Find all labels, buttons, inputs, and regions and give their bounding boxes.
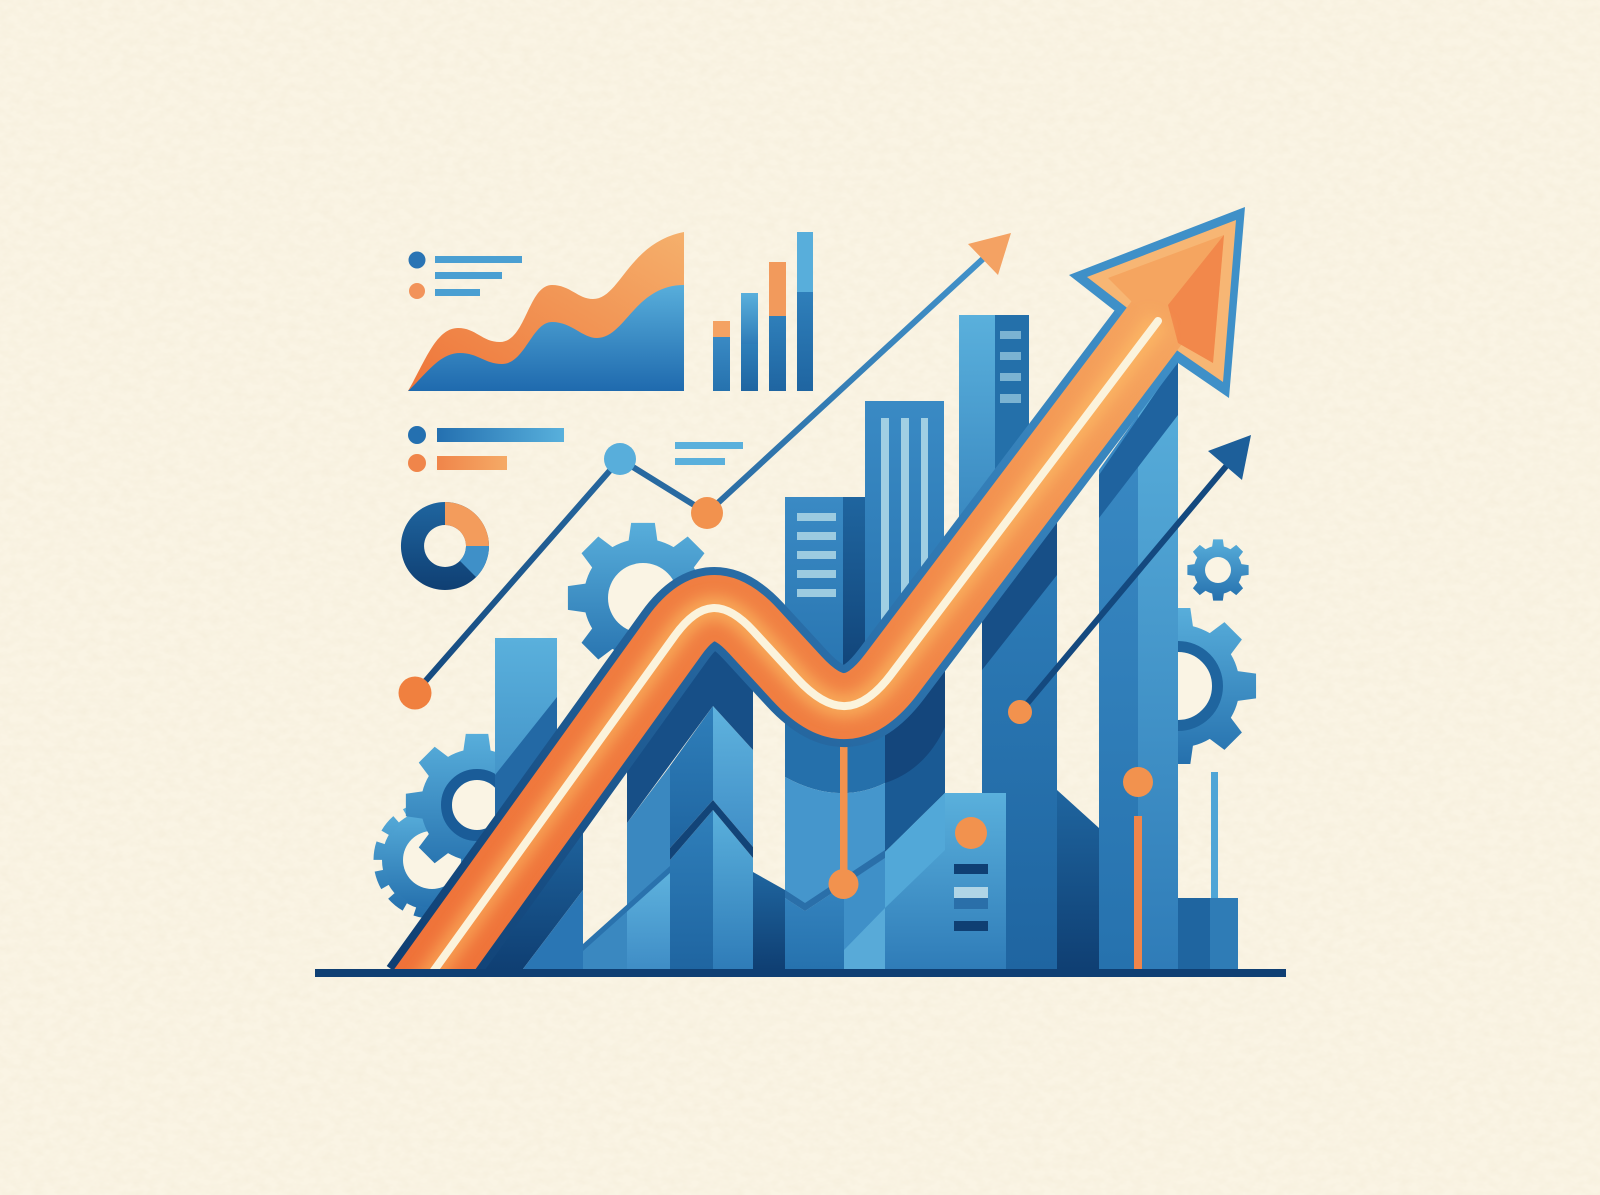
arrow head inner fill [1108, 235, 1224, 363]
arrow head border [1069, 207, 1245, 398]
buildings: right towers [982, 360, 1238, 969]
building: windowed block [785, 497, 865, 700]
legend: top list [408, 252, 522, 299]
stacked bar chart [713, 232, 813, 391]
arrow head outer fill [1087, 220, 1236, 382]
gear: large centre [568, 523, 718, 673]
trend line with orange arrowhead [398, 233, 1011, 710]
building: tall tower [959, 315, 1029, 590]
ground line [315, 969, 1286, 977]
small note lines [675, 442, 743, 465]
arrow shaft border [420, 329, 1152, 990]
buildings: lower left cluster [476, 630, 785, 969]
building: low block with dot and rows [885, 793, 1006, 969]
building: left bar [495, 638, 557, 908]
gear: small right [1187, 539, 1249, 601]
donut chart [401, 502, 489, 590]
legend: thick bars [408, 426, 564, 472]
dark arrow line [1008, 435, 1251, 724]
main rising arrow [420, 207, 1245, 990]
gear: lower left back [379, 807, 485, 913]
building: striped tower [865, 401, 944, 700]
arrow centre highlight [420, 321, 1158, 990]
gear: large right [1100, 608, 1256, 764]
buildings: centre block [785, 650, 945, 969]
orange pin: centre [828, 745, 858, 899]
arrow head shaded facet [1168, 235, 1224, 363]
orange pin: right tower [1123, 767, 1153, 969]
gear: lower left front [406, 734, 548, 876]
arrow shaft orange [420, 321, 1158, 990]
area chart [408, 232, 684, 391]
arrow glow [420, 321, 1158, 990]
